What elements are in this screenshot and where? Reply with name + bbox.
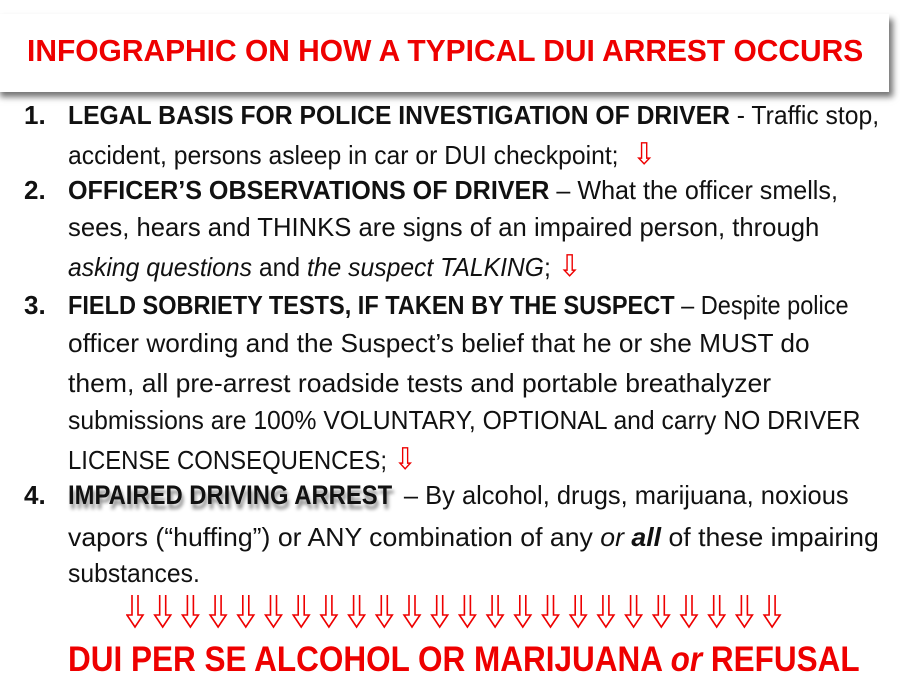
item 4: substances. xyxy=(68,558,200,588)
item 3: officer wording and the Suspect’s belief that he or she MUST do xyxy=(68,328,810,358)
item 3: FIELD SOBRIETY TESTS, IF TAKEN BY THE SUSPECT – Despite police xyxy=(68,290,849,320)
item 4: vapors (“huffing”) or ANY combination of any or all of these impairing xyxy=(68,522,879,552)
conclusion: DUI PER SE ALCOHOL OR MARIJUANA or REFUSAL xyxy=(68,640,860,679)
item 2 xyxy=(24,175,838,284)
item 1: 1. xyxy=(24,100,46,130)
item 4: – By alcohol, drugs, marijuana, noxious xyxy=(404,480,849,510)
item 3 xyxy=(24,290,861,477)
item 3: submissions are 100% VOLUNTARY, OPTIONAL and carry NO DRIVER xyxy=(68,405,861,435)
item 1: LEGAL BASIS FOR POLICE INVESTIGATION OF DRIVER - Traffic stop, xyxy=(68,100,879,130)
item 3: LICENSE CONSEQUENCES; ⇩ xyxy=(68,442,417,477)
item 2: asking questions and the suspect TALKING; ⇩ xyxy=(68,249,582,284)
title box xyxy=(0,14,889,92)
item 2: sees, hears and THINKS are signs of an impaired person, through xyxy=(68,212,819,242)
item 2: OFFICER’S OBSERVATIONS OF DRIVER – What the officer smells, xyxy=(68,175,838,205)
item 3: them, all pre-arrest roadside tests and portable breathalyzer xyxy=(68,368,771,398)
item 3: 3. xyxy=(24,290,46,320)
item 1 xyxy=(24,100,879,172)
item 4 xyxy=(24,480,879,588)
item 2: 2. xyxy=(24,175,46,205)
item 1: accident, persons asleep in car or DUI checkpoint; ⇩ xyxy=(68,137,656,172)
arrows row xyxy=(126,595,782,628)
item 4: IMPAIRED DRIVING ARREST xyxy=(68,480,392,510)
item 4: 4. xyxy=(24,480,46,510)
title: INFOGRAPHIC ON HOW A TYPICAL DUI ARREST OCCURS xyxy=(27,33,863,68)
